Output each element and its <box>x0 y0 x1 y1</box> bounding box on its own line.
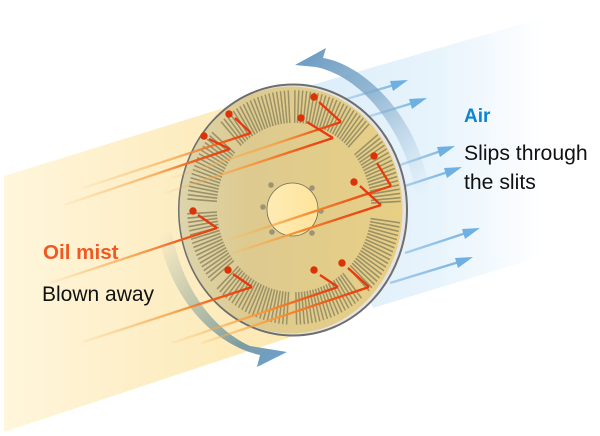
band: oil mist flow <box>4 103 320 432</box>
arrow: rotation bottom <box>158 232 287 367</box>
oil mist deflection lines <box>50 102 391 343</box>
arrow: air 4 <box>405 167 462 186</box>
slits <box>187 90 401 325</box>
arrow: air 3 <box>400 146 455 165</box>
disc face <box>180 86 402 334</box>
center hole <box>267 183 318 236</box>
label: oil mist: Oil mist <box>43 241 119 264</box>
text: slips through the slits: the slits <box>464 171 536 194</box>
oil droplets <box>189 93 378 274</box>
arrow: air 1 <box>343 80 408 100</box>
disc <box>179 84 407 336</box>
arrow: air 6 <box>390 257 473 283</box>
arrows: air passing through <box>343 80 480 283</box>
label: air: Air <box>464 106 491 127</box>
band: air flow <box>312 13 560 308</box>
arrow: air 5 <box>405 228 480 253</box>
text: blown away: Blown away <box>42 283 155 306</box>
text: slips through the slits: Slips through <box>464 142 588 165</box>
bolt holes <box>260 182 324 236</box>
arrow: air 2 <box>367 98 427 117</box>
arrow: rotation top <box>295 48 430 195</box>
disc rim <box>179 84 407 336</box>
